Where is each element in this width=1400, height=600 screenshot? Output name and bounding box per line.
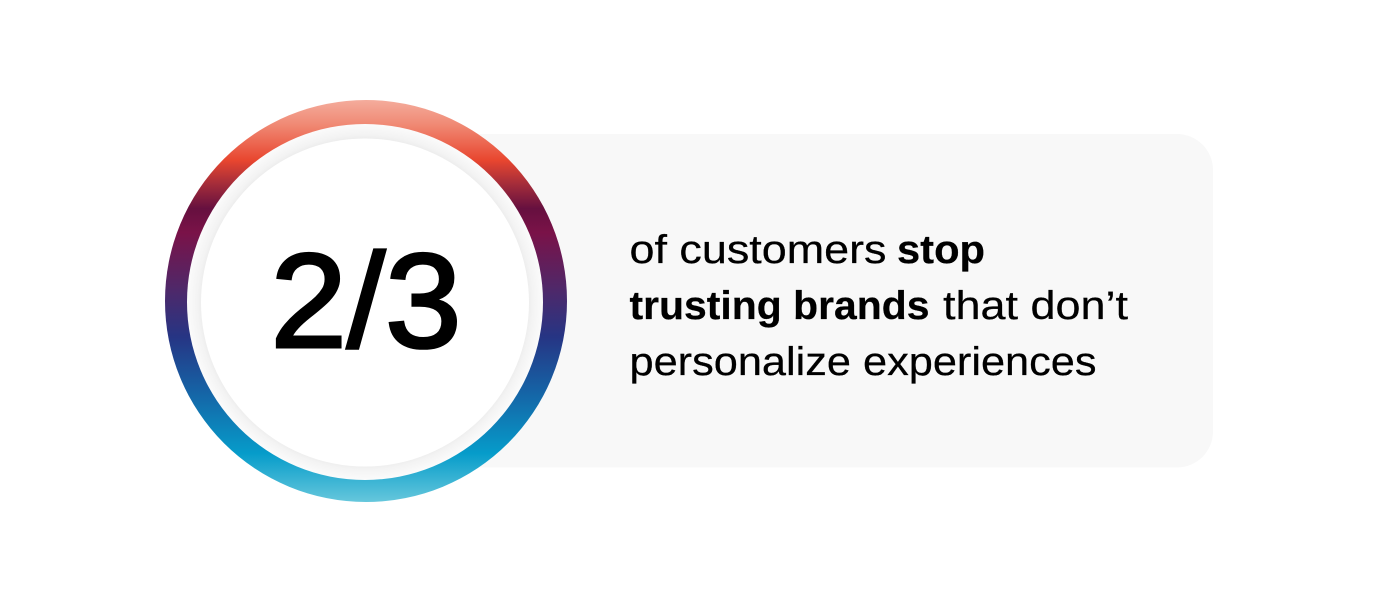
text block: description: stop bbox=[897, 228, 985, 272]
text block: description: personalize experiences bbox=[630, 340, 1096, 384]
text block: description: that don’t bbox=[943, 284, 1128, 328]
text block: description bbox=[630, 228, 1128, 384]
inner bevel ring bbox=[187, 124, 543, 480]
panel: text background bbox=[366, 134, 1213, 468]
gradient ring bbox=[165, 100, 567, 502]
text block: description: trusting brands bbox=[630, 284, 930, 328]
text block: description: of customers bbox=[630, 228, 886, 272]
statistic: 2/3: 2/3 bbox=[270, 227, 462, 376]
white centre disc bbox=[201, 138, 529, 466]
